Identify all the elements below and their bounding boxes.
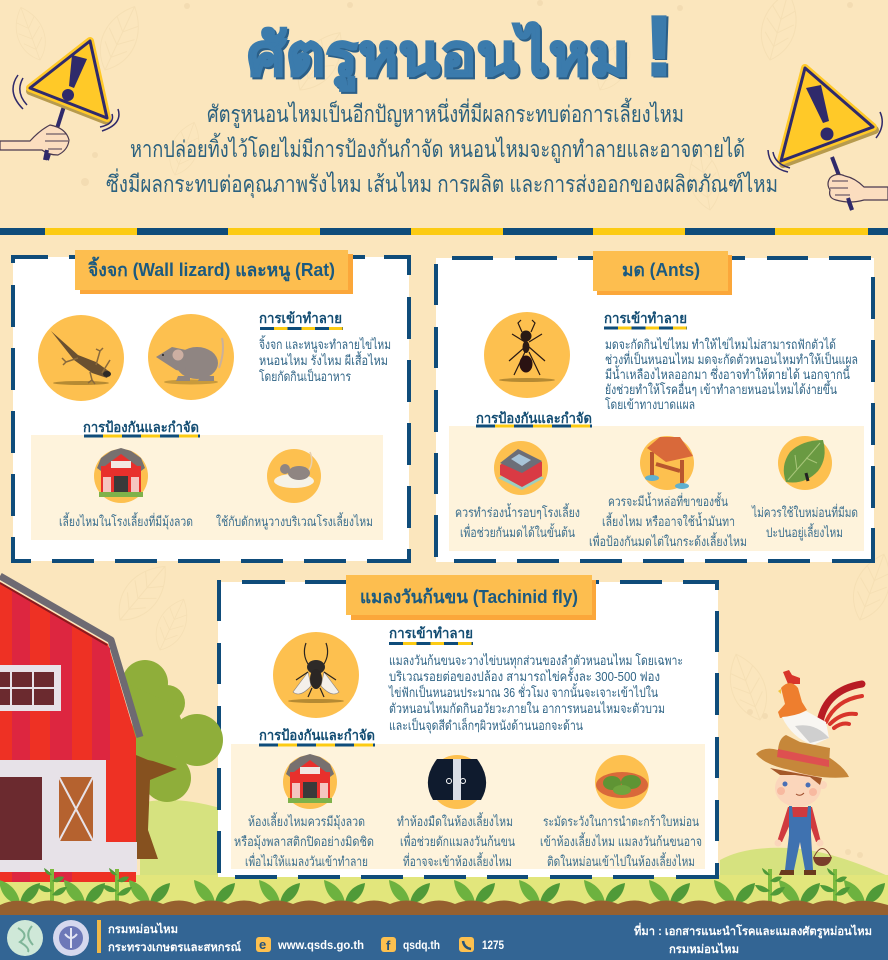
text: damage: โดยกัดกินเป็นอาหาร — [259, 367, 351, 384]
text: damage: จิ้งจก และหนูจะทำลายไข่ไหม — [259, 335, 391, 353]
panel title: จิ้งจก (Wall lizard) และหนู (Rat) — [88, 256, 335, 282]
contact links: www.qsds.go.th — [277, 940, 364, 952]
text: prevention items: เพื่อช่วยกันมดได้ในขั้นต้น — [460, 523, 575, 540]
title: ศัตรูหนอนไหม — [249, 24, 631, 93]
prevention box — [449, 426, 864, 551]
heading: damage: การเข้าทำลาย — [259, 310, 342, 326]
source credit: ที่มา : เอกสารแนะนำโรคและแมลงศัตรูหม่อนไหม — [634, 922, 872, 939]
contact links: 1275 — [482, 940, 505, 952]
icon: table in water — [640, 436, 694, 490]
text: damage — [388, 653, 683, 734]
text: damage: ตัวหนอนไหมกัดกินอวัยวะภายใน อาการหนอนไหมจะตัวบวม — [389, 701, 665, 716]
icon: mulberry leaf — [778, 436, 832, 490]
icon: rat — [148, 314, 234, 400]
text: damage — [259, 335, 391, 384]
intro text — [106, 98, 778, 198]
panel title — [346, 575, 596, 620]
contact links — [256, 937, 505, 953]
scene: barn and tree — [0, 576, 223, 882]
heading: damage: การเข้าทำลาย — [389, 625, 473, 641]
text: damage: โดยเข้าทางบาดแผล — [605, 397, 695, 412]
icon: tree — [122, 660, 223, 859]
text: prevention items: เพื่อไม่ให้แมลงวันเข้าทำลาย — [245, 853, 368, 869]
logo: ministry — [53, 920, 89, 956]
prevention box — [31, 435, 383, 540]
text: damage: และเป็นจุดสีดำเล็กๆผิวหนังด้านนอกจะด้าน — [389, 716, 583, 734]
footer organisation: กระทรวงเกษตรและสหกรณ์ — [108, 940, 241, 954]
text: prevention items: ห้องเลี้ยงไหมควรมีมุ้งลวด — [248, 812, 365, 830]
icon: boy — [770, 768, 832, 875]
icon: dark door — [428, 755, 486, 809]
text: damage: แมลงวันก้นขนจะวางไข่บนทุกส่วนของลำตัวหนอนไหม โดยเฉพาะ — [389, 653, 683, 669]
ground strip — [0, 875, 888, 910]
divider stripe — [0, 228, 888, 235]
title — [247, 0, 675, 94]
text: damage: ไข่ฟักเป็นหนอนประมาณ 36 ชั่วโมง จากนั้นจะเจาะเข้าไปใน — [388, 683, 658, 700]
text: damage: หนอนไหม รังไหม ผีเสื้อไหม — [259, 351, 388, 368]
title: ! — [647, 0, 675, 94]
heading: prevention: การป้องกันและกำจัด — [83, 419, 199, 435]
panel: ants — [436, 251, 875, 563]
icon: warning sign right — [768, 68, 888, 210]
heading: prevention: การป้องกันและกำจัด — [259, 727, 375, 743]
icon: barn — [0, 576, 140, 882]
panel title — [75, 250, 353, 294]
text: prevention items: เข้าห้องเลี้ยงไหม แมลงวันก้นขนอาจ — [540, 832, 702, 849]
panel title — [593, 251, 732, 295]
intro text: หากปล่อยทิ้งไว้โดยไม่มีการป้องกันกำจัด หนอนไหมจะถูกทำลายและอาจตายได้ — [130, 133, 745, 163]
icon: rooster — [778, 670, 862, 745]
text: prevention items: เพื่อป้องกันมดไต่ในกระด้งเลี้ยงไหม — [589, 532, 747, 549]
text: prevention items: ทำห้องมืดในห้องเลี้ยงไหม — [397, 812, 513, 829]
panel: tachinid fly — [218, 575, 719, 879]
text: prevention items — [59, 512, 373, 530]
text: prevention items: เพื่อช่วยดักแมลงวันก้นขน — [400, 833, 515, 849]
soil — [0, 900, 888, 916]
contact links: e — [259, 937, 266, 952]
text: prevention items: เลี้ยงไหมในโรงเลี้ยงที่มีมุ้งลวด — [59, 512, 193, 530]
icon: warning sign left — [0, 41, 119, 160]
illustration: farmer with rooster — [756, 670, 862, 875]
footer organisation: กรมหม่อนไหม — [108, 922, 178, 936]
icon: ant — [484, 312, 570, 398]
icon: basket of leaves — [595, 755, 649, 809]
text: prevention items: ใช้กับดักหนูวางบริเวณโรงเลี้ยงไหม — [216, 512, 373, 530]
text: prevention items: ควรทำร่องน้ำรอบๆโรงเลี้ยง — [455, 503, 580, 520]
icon: hat — [756, 735, 849, 778]
crops row — [0, 868, 885, 905]
text: prevention items — [234, 812, 702, 869]
contact links: f — [386, 938, 391, 953]
text: prevention items: ควรจะมีน้ำหล่อที่ขาของชั้น — [608, 492, 728, 509]
icon: gecko — [38, 315, 124, 401]
text: damage: บริเวณรอยต่อของปล้อง สามารถไข่ครั้งละ 300-500 ฟอง — [389, 667, 660, 684]
text: prevention items — [455, 492, 858, 549]
text: prevention items: ติดในหม่อนเข้าไปในห้องเลี้ยงไหม — [547, 852, 695, 869]
text: damage: มดจะกัดกินไข่ไหม ทำให้ไข่ไหมไม่สามารถฟักตัวได้ — [605, 337, 836, 352]
text: damage — [605, 337, 858, 412]
footer — [0, 915, 888, 960]
text: damage: ยังช่วยทำให้โรคอื่นๆ เข้าทำลายหนอนไหมได้ง่ายขึ้น — [605, 380, 837, 397]
prevention box — [231, 744, 705, 869]
text: prevention items: ระมัดระวังในการนำตะกร้าใบหม่อน — [543, 814, 699, 829]
title: ศัตรูหนอนไหม — [247, 22, 629, 91]
heading: prevention: การป้องกันและกำจัด — [476, 410, 592, 426]
heading: damage: การเข้าทำลาย — [604, 310, 687, 326]
text: prevention items: เลี้ยงไหม หรืออาจใช้น้ำมันทา — [602, 512, 735, 529]
text: prevention items: หรือมุ้งพลาสติกปิดอย่างมิดชิด — [234, 834, 374, 850]
source credit — [634, 922, 872, 956]
intro text: ศัตรูหนอนไหมเป็นอีกปัญหาหนึ่งที่มีผลกระทบต่อการเลี้ยงไหม — [207, 98, 684, 128]
icon: barn small — [94, 448, 148, 503]
source credit: กรมหม่อนไหม — [669, 942, 739, 956]
icon: barn small — [283, 754, 337, 809]
panel title: แมลงวันก้นขน (Tachinid fly) — [360, 587, 578, 607]
text: prevention items: ปะปนอยู่เลี้ยงไหม — [766, 523, 843, 541]
icon: building — [494, 441, 548, 495]
text: prevention items: ไม่ควรใช้ใบหม่อนที่มีมด — [751, 504, 858, 520]
footer organisation — [108, 922, 241, 954]
contact links: qsdq.th — [403, 940, 440, 952]
icon: fly — [273, 632, 359, 718]
panel title: มด (Ants) — [622, 260, 700, 280]
title: ! — [645, 0, 673, 93]
text: prevention items: ที่อาจจะเข้าห้องเลี้ยงไหม — [403, 852, 512, 869]
logo: department — [7, 920, 43, 956]
icon: mouse trap — [267, 449, 321, 503]
panel: lizard and rat — [11, 250, 411, 563]
